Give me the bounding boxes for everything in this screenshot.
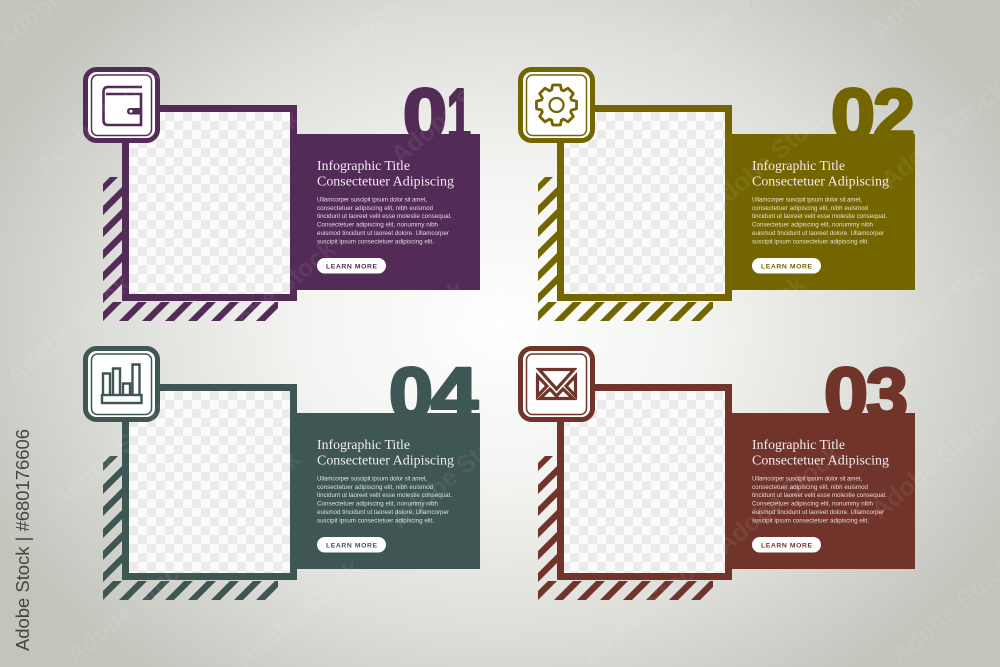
number 02: 2 — [873, 75, 915, 156]
body text 03: consectetuer adipiscing elit, nibh euismod — [752, 484, 869, 491]
body text 01: euismod tincidunt ut laoreet dolore. Ullamcorper — [317, 230, 449, 237]
watermark overlay: Adobe Stock — [866, 405, 1000, 525]
hatch 01 — [103, 177, 278, 321]
title 03 — [752, 438, 889, 468]
number 01 — [403, 75, 471, 156]
button 04 — [317, 537, 386, 552]
title 02: Consectetuer Adipiscing — [752, 174, 889, 190]
watermark overlay: Adobe Stock — [576, 550, 711, 667]
panel 03: brown card — [520, 348, 915, 600]
panel 02: olive card — [520, 70, 915, 321]
text panel 01 — [297, 134, 480, 290]
number 03: 0 — [824, 354, 868, 435]
body text 04: euismod tincidunt ut laoreet dolore. Ullamcorper — [317, 509, 449, 516]
watermark overlay: Adobe Stock — [701, 100, 836, 220]
text panel 03 — [732, 413, 915, 569]
watermark overlay: Adobe Stock — [61, 550, 196, 667]
watermark overlay: Adobe Stock — [386, 415, 521, 535]
watermark overlay: Adobe Stock — [171, 105, 306, 225]
body text 01: Consectetuer adipiscing elit, nonummy nibh — [317, 222, 439, 228]
number 01: 1 — [447, 75, 471, 156]
title 01: Consectetuer Adipiscing — [317, 174, 454, 190]
body text 04: suscipit ipsum consectetuer adipiscing elit. — [317, 518, 434, 524]
image frame 01 — [126, 108, 294, 298]
title 03: Infographic Title — [752, 438, 845, 453]
body text 01: tincidunt ut laoreet velit esse molestie consequat. — [317, 213, 452, 220]
image frame 02 — [560, 108, 728, 298]
body text 01 — [317, 196, 452, 246]
hatch 02 — [538, 177, 713, 321]
icon: gear — [520, 70, 592, 140]
body text 03: Ullamcorper suscipit ipsum dolor sit amet, — [752, 476, 862, 482]
hatch 03 — [538, 456, 713, 600]
button 03 — [752, 537, 821, 552]
button 02: LEARN MORE — [761, 263, 812, 270]
text panel 04 — [297, 413, 480, 569]
body text 04 — [317, 476, 452, 524]
watermark overlay: Adobe Stock — [46, 395, 181, 515]
body text 03: suscipit ipsum consectetuer adipiscing elit. — [752, 518, 869, 524]
number 04: 0 — [389, 354, 433, 435]
body text 02: Ullamcorper suscipit ipsum dolor sit amet, — [752, 196, 862, 204]
title 04: Consectetuer Adipiscing — [317, 454, 454, 468]
body text 02: consectetuer adipiscing elit, nibh euismod — [752, 205, 869, 212]
body text 03: tincidunt ut laoreet velit esse molestie consequat. — [752, 492, 887, 499]
body text 02 — [752, 196, 887, 246]
body text 03: Consectetuer adipiscing elit, nonummy nibh — [752, 500, 874, 508]
hatch 04 — [103, 456, 278, 600]
number 01: 0 — [403, 75, 447, 156]
number 03: 3 — [866, 354, 908, 435]
title 04 — [317, 438, 454, 468]
panel 01: purple card — [86, 70, 480, 321]
number 04 — [389, 354, 478, 435]
body text 02: Consectetuer adipiscing elit, nonummy nibh — [752, 222, 874, 228]
text panel 02 — [732, 134, 915, 290]
title 02: Infographic Title — [752, 159, 845, 174]
title 03: Consectetuer Adipiscing — [752, 454, 889, 468]
button 01 — [317, 258, 386, 274]
body text 02: euismod tincidunt ut laoreet dolore. Ullamcorper — [752, 230, 884, 237]
body text 04: consectetuer adipiscing elit, nibh euismod — [317, 484, 434, 491]
body text 01: consectetuer adipiscing elit, nibh euismod — [317, 205, 434, 212]
watermark overlay: Adobe Stock — [386, 50, 521, 170]
icon: envelope — [520, 348, 592, 420]
watermark overlay: Adobe Stock — [711, 440, 846, 560]
number 02: 0 — [831, 75, 875, 156]
panel 04: teal card — [86, 348, 480, 600]
body text 04: tincidunt ut laoreet velit esse molestie consequat. — [317, 492, 452, 499]
image frame 04 — [126, 388, 294, 576]
body text 03 — [752, 476, 887, 524]
watermark overlay: Adobe Stock — [31, 60, 166, 180]
button 03: LEARN MORE — [761, 542, 812, 549]
button 02 — [752, 258, 821, 274]
button 04: LEARN MORE — [326, 542, 377, 549]
body text 04: Consectetuer adipiscing elit, nonummy nibh — [317, 500, 439, 508]
stock id side label: Adobe Stock | #680176606 — [13, 429, 33, 651]
icon: wallet — [86, 70, 158, 140]
body text 04: Ullamcorper suscipit ipsum dolor sit amet, — [317, 476, 427, 482]
title 01: Infographic Title — [317, 159, 410, 174]
icon: bar chart — [86, 348, 158, 420]
button 01: LEARN MORE — [326, 263, 377, 270]
watermark overlay: Adobe Stock — [206, 235, 341, 355]
body text 01: Ullamcorper suscipit ipsum dolor sit amet, — [317, 196, 427, 204]
body text 02: suscipit ipsum consectetuer adipiscing elit. — [752, 238, 869, 246]
title 01 — [317, 159, 454, 190]
watermark overlay: Adobe Stock — [1, 270, 136, 390]
number 04: 4 — [431, 354, 478, 435]
number 02 — [831, 75, 915, 156]
title 04: Infographic Title — [317, 438, 410, 453]
watermark overlay: Adobe Stock — [336, 275, 471, 395]
image frame 03 — [560, 388, 728, 576]
body text 02: tincidunt ut laoreet velit esse molestie consequat. — [752, 213, 887, 220]
body text 01: suscipit ipsum consectetuer adipiscing elit. — [317, 238, 434, 246]
title 02 — [752, 159, 889, 190]
body text 03: euismod tincidunt ut laoreet dolore. Ullamcorper — [752, 509, 884, 516]
watermark overlay: Adobe Stock — [171, 445, 306, 565]
number 03 — [824, 354, 908, 435]
watermark overlay: Adobe Stock — [676, 270, 811, 390]
